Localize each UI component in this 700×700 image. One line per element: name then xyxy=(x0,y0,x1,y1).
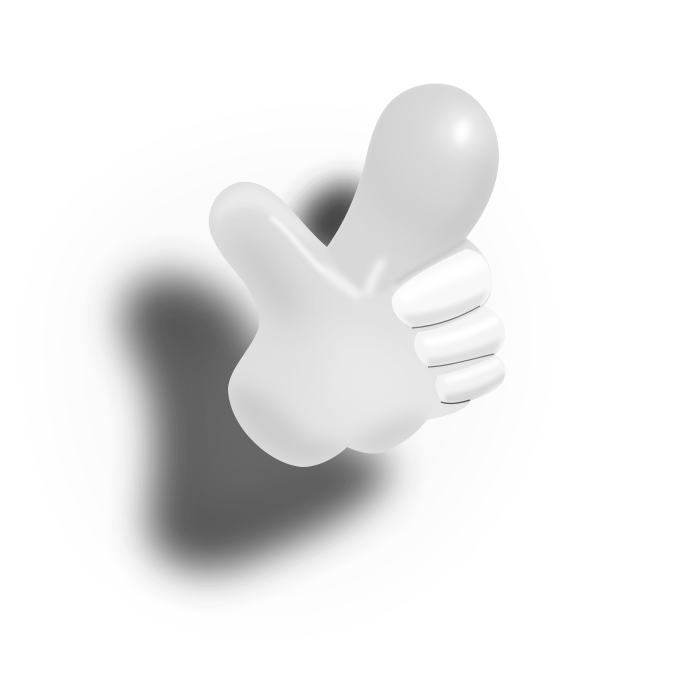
thumb highlight xyxy=(454,120,469,144)
hand xyxy=(209,84,506,467)
thumb shading xyxy=(480,174,489,182)
illustration: 3D white thumbs-up hand xyxy=(88,84,506,603)
bottom curled finger xyxy=(425,396,474,420)
palm light xyxy=(320,328,425,419)
cast shadow xyxy=(60,145,516,603)
first finger xyxy=(392,249,492,329)
third finger xyxy=(436,355,506,403)
hand silhouette xyxy=(209,84,505,467)
thumb xyxy=(332,88,499,272)
second finger xyxy=(414,306,505,368)
palm lower shading xyxy=(228,386,347,466)
index finger highlights and shading xyxy=(218,188,305,234)
finger creases xyxy=(396,240,466,283)
